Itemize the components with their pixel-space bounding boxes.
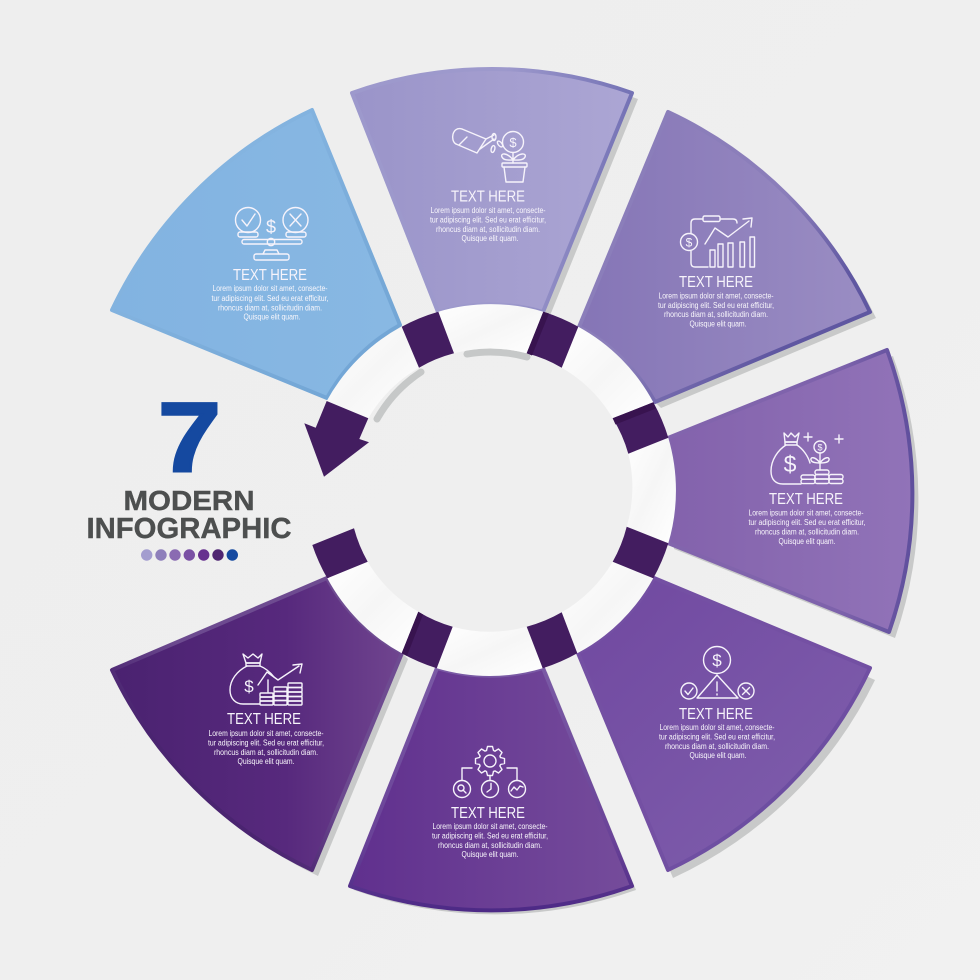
heading: TEXT HERE xyxy=(227,711,301,728)
text block: rhoncus diam at, sollicitudin diam. xyxy=(438,841,542,850)
panel: step 2 lilac xyxy=(352,69,632,312)
text block: tur adipiscing elit. Sed eu erat efficitur, xyxy=(748,518,866,527)
panel: step 7 dark purple xyxy=(112,578,402,870)
text block: Lorem ipsum dolor sit amet, consecte- xyxy=(658,292,774,300)
ring connectors xyxy=(312,312,668,668)
panel: step 6 xyxy=(350,668,632,910)
text block: tur adipiscing elit. Sed eu erat efficitur, xyxy=(430,216,546,224)
icon: money bag and coin plant xyxy=(771,433,843,484)
text block: tur adipiscing elit. Sed eu erat efficitur, xyxy=(432,832,548,840)
icon: money bag and growth: $ xyxy=(244,677,254,696)
title block xyxy=(86,382,292,561)
text block: tur adipiscing elit. Sed eu erat efficitur, xyxy=(208,738,324,748)
text block: tur adipiscing elit. Sed eu erat efficitur, xyxy=(659,732,775,742)
icon: clipboard with chart: $ xyxy=(686,236,693,250)
text block: Quisque elit quam. xyxy=(462,234,518,243)
icon: balance scale xyxy=(236,208,308,260)
colour dots xyxy=(141,549,238,561)
icon: balance scale: $ xyxy=(266,217,276,237)
text block: Quisque elit quam. xyxy=(690,751,746,760)
text block: tur adipiscing elit. Sed eu erat efficitur, xyxy=(658,301,774,310)
text block: Lorem ipsum dolor sit amet, consecte- xyxy=(208,729,324,738)
heading: TEXT HERE xyxy=(679,274,753,291)
icon: money bag and growth xyxy=(230,654,302,705)
icon: money bag and coin plant: $ xyxy=(784,451,797,477)
icon: clipboard with chart xyxy=(680,216,754,267)
text block xyxy=(212,284,328,322)
text block xyxy=(430,206,546,243)
text block: rhoncus diam at, sollicitudin diam. xyxy=(218,304,322,312)
connector shading xyxy=(402,312,656,656)
text block: Quisque elit quam. xyxy=(238,757,294,766)
text block xyxy=(658,292,774,328)
text block: Quisque elit quam. xyxy=(244,312,300,322)
central ring xyxy=(304,304,676,676)
text block: rhoncus diam at, sollicitudin diam. xyxy=(755,528,859,536)
text block: Lorem ipsum dolor sit amet, consecte- xyxy=(432,822,548,831)
text block: Quisque elit quam. xyxy=(778,537,836,546)
panel: step 5 xyxy=(578,578,870,870)
text block: Lorem ipsum dolor sit amet, consecte- xyxy=(660,723,775,732)
panel: step 3 xyxy=(579,112,870,402)
text block: Lorem ipsum dolor sit amet, consecte- xyxy=(212,284,328,293)
heading: TEXT HERE xyxy=(769,491,843,508)
panel: step 1 blue xyxy=(112,110,400,398)
arrow xyxy=(304,401,369,477)
text block: rhoncus diam at, sollicitudin diam. xyxy=(665,742,769,751)
text block: Quisque elit quam. xyxy=(462,850,518,859)
number 7: 7 xyxy=(158,382,221,492)
ring segments xyxy=(327,304,676,676)
icon: risk triangle: $ xyxy=(712,651,722,670)
icon: watering can and plant: $ xyxy=(509,135,517,150)
heading: modern: MODERN xyxy=(124,485,254,516)
heading: infographic: INFOGRAPHIC xyxy=(86,513,292,545)
text block: Lorem ipsum dolor sit amet, consecte- xyxy=(748,508,864,518)
text block xyxy=(208,729,324,766)
text block xyxy=(748,508,866,546)
text block: Quisque elit quam. xyxy=(690,320,746,328)
icon: risk triangle xyxy=(681,646,754,699)
text block: tur adipiscing elit. Sed eu erat efficitur, xyxy=(212,294,328,303)
icon: gear flow xyxy=(454,746,526,798)
panel: step 4 xyxy=(668,350,912,632)
text block: Lorem ipsum dolor sit amet, consecte- xyxy=(430,206,546,215)
panel shadows xyxy=(118,75,918,914)
icon: watering can and plant xyxy=(453,129,527,182)
ring shadows xyxy=(377,352,527,419)
heading: TEXT HERE xyxy=(679,706,753,723)
heading: TEXT HERE xyxy=(451,188,525,206)
text block xyxy=(432,822,548,859)
heading: TEXT HERE xyxy=(233,267,307,284)
icon: money bag and coin plant: $ xyxy=(817,442,823,452)
text block xyxy=(659,723,775,760)
text block: rhoncus diam at, sollicitudin diam. xyxy=(214,748,318,757)
heading: TEXT HERE xyxy=(451,805,525,822)
text block: rhoncus diam at, sollicitudin diam. xyxy=(436,225,540,234)
text block: rhoncus diam at, sollicitudin diam. xyxy=(664,310,768,319)
